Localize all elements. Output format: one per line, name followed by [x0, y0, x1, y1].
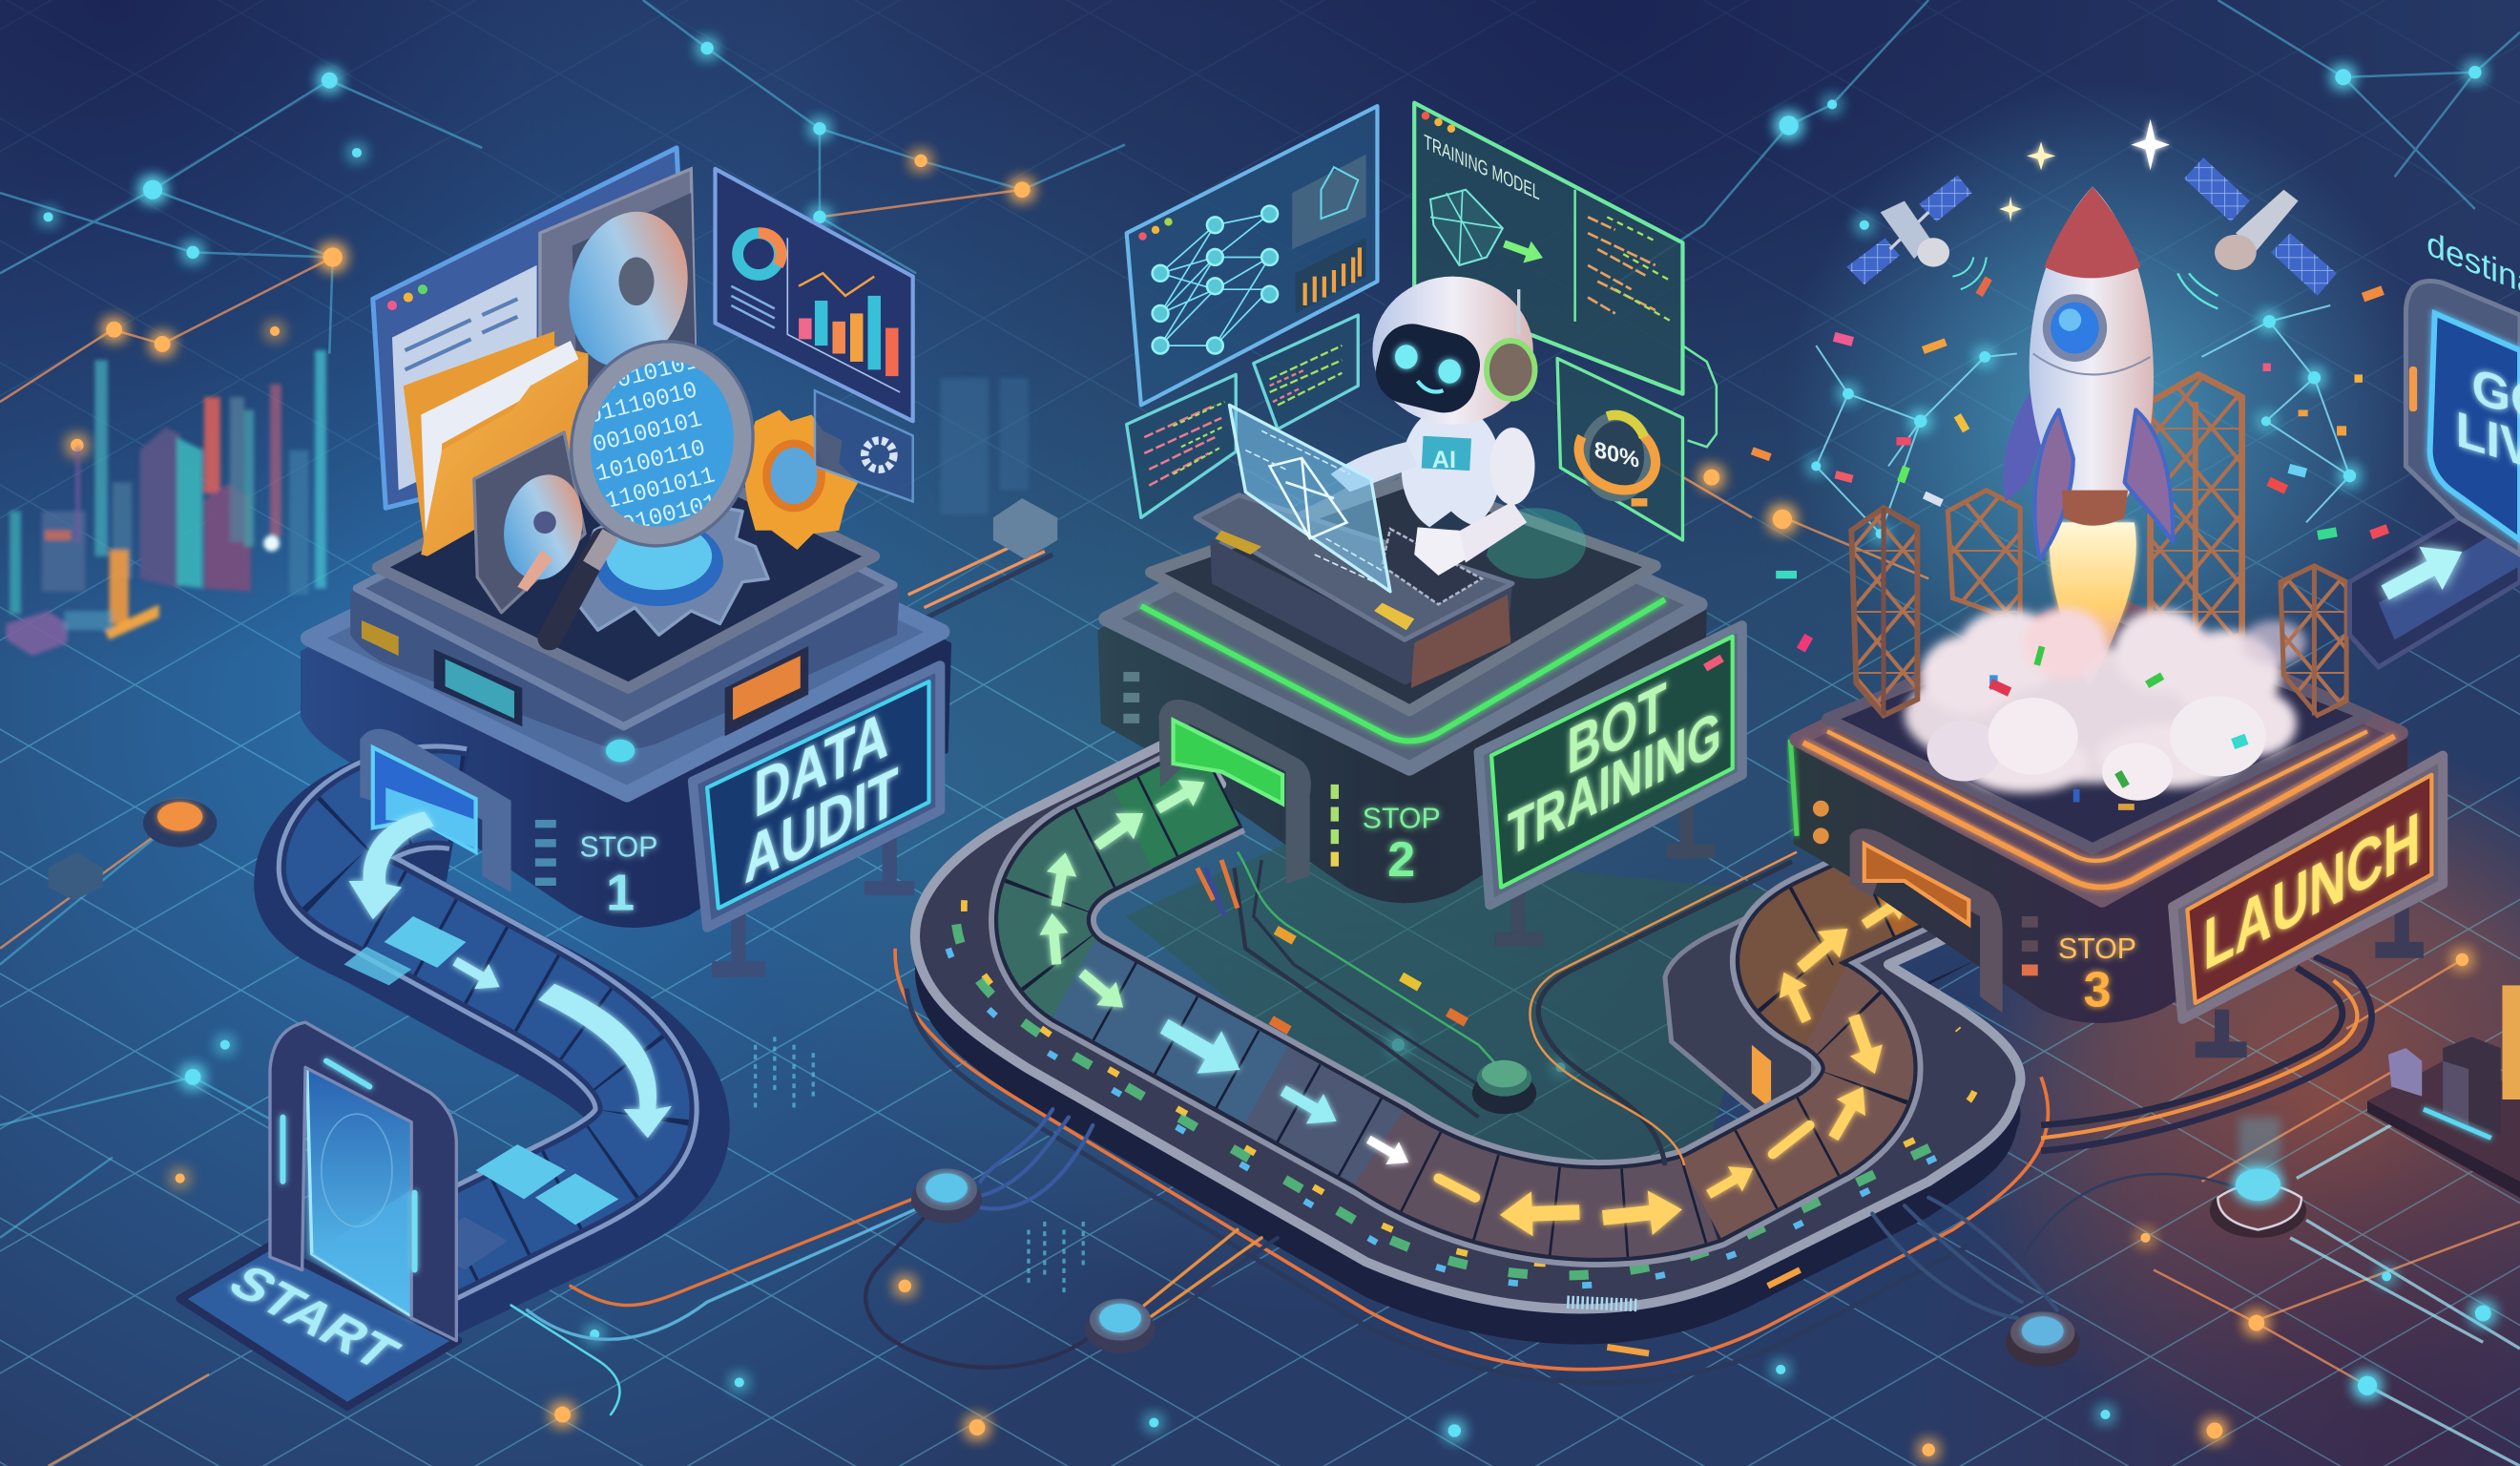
dashboard panel: [716, 169, 913, 421]
sign posts stop 2: [1494, 804, 1715, 947]
track arrows orange: [1438, 883, 1918, 1240]
platform 1 objects: 01001010: [619, 488, 734, 539]
start gate: [180, 1022, 458, 1407]
holographic panels: stop 2: [1127, 103, 1717, 540]
platform: stop 1: 1: [606, 864, 635, 921]
platform 1 objects: 10010101: [587, 349, 701, 401]
tower 2: [1947, 491, 2020, 629]
platform: stop 2: [1097, 466, 1707, 903]
conveyor ledge: [915, 731, 2021, 1309]
plate: [1151, 479, 1656, 710]
gray gear: [571, 491, 768, 635]
main conveyor: [895, 731, 2048, 1383]
gear panel: [815, 390, 913, 501]
right arm: [1489, 428, 1535, 505]
progress panel: [1557, 359, 1682, 540]
rocket body: [2030, 186, 2154, 501]
sign: launch: LAUNCH: [2203, 797, 2421, 986]
status light: [606, 740, 635, 762]
large hard drive: [540, 169, 696, 421]
back left fin: [2003, 392, 2044, 501]
holographic panels: stop 2: 80%: [1594, 437, 1639, 473]
small city bottom right: [2367, 985, 2520, 1198]
platform: stop 1: [301, 437, 951, 928]
inner ground region of main conveyor: [1125, 844, 1784, 1198]
platform: stop 3: [1790, 587, 2407, 1023]
door: stop 3: [1850, 828, 2003, 1013]
green button: [1472, 1060, 1536, 1114]
rocket: [2003, 186, 2173, 688]
connector box behind stop 1: [908, 498, 1057, 618]
platform 1 objects: 11001011: [603, 463, 718, 515]
sign: data audit: DATA: [754, 696, 888, 832]
chip: [49, 852, 103, 900]
platform 1 objects: 00100101: [591, 407, 705, 459]
magnifier lens: [550, 322, 775, 565]
platform 1 objects: 01110010: [586, 378, 700, 430]
stars: [1999, 119, 2170, 221]
confetti: [1632, 276, 2389, 810]
node d: [2210, 1118, 2306, 1238]
arch frame: [270, 1022, 456, 1341]
sign posts stop 1: [712, 827, 914, 977]
platform 1 objects: 10100110: [594, 436, 708, 488]
magnifier handle: [550, 540, 603, 639]
right fin: [2125, 409, 2173, 542]
satellite left: [1846, 176, 1987, 289]
head: [1372, 277, 1533, 425]
base plate: [180, 1246, 458, 1407]
left arm: [1331, 442, 1418, 492]
junction nodes: [49, 799, 2306, 1367]
training model panel: [1414, 103, 1682, 394]
top plate: [378, 437, 874, 688]
stop text: STOP: [1363, 803, 1441, 834]
glass: [307, 1064, 415, 1318]
lines from the right node: [2290, 1120, 2520, 1466]
hologram screen: [1229, 405, 1390, 592]
door: stop 2: [1158, 700, 1311, 884]
interior side wall near stop 3: [1665, 884, 1816, 1112]
conveyor side: [915, 766, 2021, 1344]
code panels: [1127, 374, 1236, 517]
clouds: [1905, 608, 2306, 801]
nozzle: [2062, 491, 2128, 526]
sign: data audit: AUDIT: [744, 753, 899, 898]
satellite right: [2177, 157, 2337, 308]
data glyph marks: [756, 1037, 1083, 1294]
sign: bot training: TRAINING: [1508, 698, 1721, 870]
side cables: [511, 1109, 2242, 1414]
small drive: [474, 432, 585, 613]
sign: bot training: [1479, 625, 1742, 905]
node a: [911, 1168, 982, 1224]
holographic panels: stop 2: TRAINING MODEL: [1424, 130, 1540, 204]
launch towers front: [1851, 508, 2346, 715]
tower 4: [2280, 566, 2346, 715]
sign: launch: [2173, 756, 2443, 1019]
tile dividers: [1042, 785, 1952, 1214]
start label: START: [217, 1256, 411, 1379]
cables inside the conveyor: [1198, 852, 1797, 1165]
middle tier: [350, 458, 900, 749]
platform: stop 3: 3: [2084, 962, 2112, 1017]
stop text: STOP: [579, 832, 657, 864]
node e orange: [143, 799, 217, 848]
window panel: [373, 148, 681, 508]
track arrows blue: [1152, 1005, 1415, 1174]
launch towers back: [1947, 374, 2242, 653]
track arrows green: [1037, 769, 1212, 1019]
platform: stop 2: 2: [1387, 832, 1415, 888]
track base: [322, 813, 662, 1306]
robot: AI: [1432, 447, 1456, 473]
flame: [2050, 522, 2136, 688]
node b: [1085, 1299, 1156, 1353]
start conveyor: [322, 797, 662, 1306]
constellation lines near rocket: [1816, 305, 2349, 534]
bright tiles and arrows: first conveyor: [344, 812, 672, 1270]
vents teal: [434, 649, 522, 726]
platform: stop 3: STOP: [2058, 933, 2136, 965]
track rim: [1042, 785, 1952, 1214]
platform 1 objects: [373, 148, 913, 639]
front left fin: [2034, 409, 2073, 559]
cable along outer side: [895, 949, 2048, 1370]
folder: [404, 331, 588, 556]
track segments: [1042, 785, 1952, 1214]
door: stop 1: [360, 729, 511, 892]
green light ring: [1141, 599, 1665, 741]
lower lights: [1607, 1270, 1800, 1353]
cable loop under launch sign: [2041, 956, 2372, 1151]
node c: [2006, 1311, 2079, 1367]
screen frame: [2405, 281, 2520, 555]
keyboard: [1383, 529, 1482, 604]
desk: [1196, 495, 1512, 688]
destination path: [2347, 517, 2520, 670]
tower 1: [1851, 508, 1917, 715]
sign: data audit: [693, 665, 940, 928]
sign posts stop 3: [2196, 900, 2424, 1058]
neural net panel: [1127, 106, 1377, 405]
skyline left: [7, 350, 1029, 656]
side lights: [1123, 672, 1139, 723]
sign: bot training: BOT: [1567, 668, 1667, 789]
base body: [1097, 466, 1707, 903]
base top: [308, 482, 942, 794]
go live screen and path: [2349, 223, 2520, 667]
orange gear: [742, 409, 858, 550]
cyan pedestal: [594, 519, 723, 606]
base body: [301, 482, 951, 928]
robot: [1331, 277, 1586, 578]
status lights: [964, 900, 1979, 1264]
rocket window: [2043, 294, 2107, 362]
tower 3: [2151, 374, 2242, 653]
